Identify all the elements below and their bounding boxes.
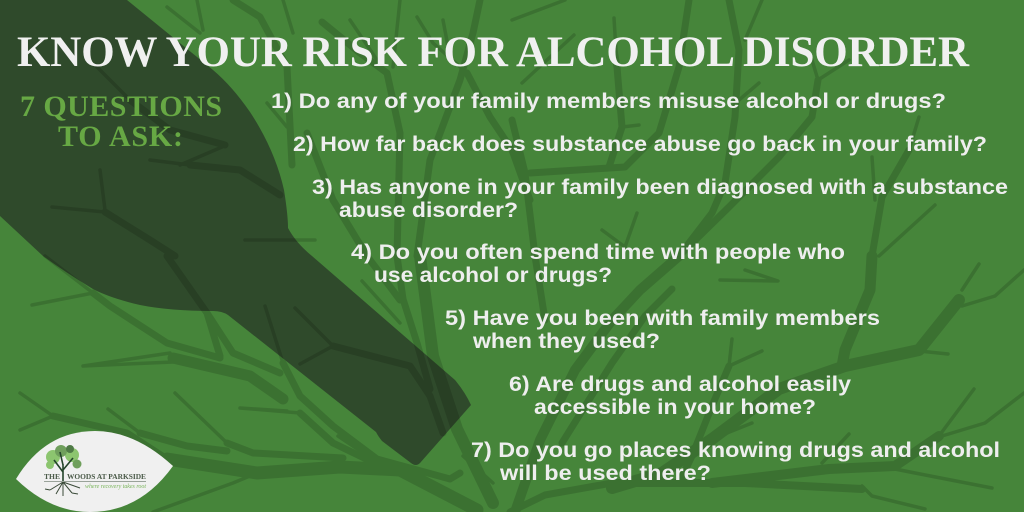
question 5: 5) Have you been with family members [445, 306, 880, 330]
question 7: 7) Do you go places knowing drugs and alcohol [471, 438, 1000, 462]
question 1: 1) Do any of your family members misuse alcohol or drugs? [271, 89, 946, 113]
logo badge [16, 431, 173, 512]
question 7: will be used there? [499, 461, 711, 485]
wine bottle silhouette [0, 0, 471, 465]
question 5 [445, 306, 880, 353]
logo wordmark: THE [44, 472, 60, 481]
question 4: use alcohol or drugs? [374, 263, 612, 287]
thick limbs [167, 256, 959, 512]
question 5: when they used? [472, 329, 660, 353]
logo rule [44, 481, 146, 482]
question 4 [351, 240, 845, 287]
question 6 [509, 372, 851, 419]
question 3: abuse disorder? [339, 198, 518, 222]
question 6: 6) Are drugs and alcohol easily [509, 372, 851, 396]
logo wordmark: WOODS AT PARKSIDE [67, 472, 146, 481]
question 6: accessible in your home? [534, 395, 816, 419]
subtitle: 7 questions to ask: 7 QUESTIONS [20, 90, 222, 123]
leaf shape [16, 431, 173, 512]
question 3: 3) Has anyone in your family been diagnosed with a substance [312, 175, 1008, 199]
question 3 [312, 175, 1008, 222]
logo tagline: where recovery takes root [85, 484, 146, 490]
subtitle: 7 questions to ask [20, 90, 222, 153]
title: KNOW YOUR RISK FOR ALCOHOL DISORDER [17, 29, 970, 76]
question 7 [471, 438, 1000, 485]
subtitle: 7 questions to ask: TO ASK: [58, 120, 183, 153]
icon: tree logo [45, 445, 82, 496]
question 2: 2) How far back does substance abuse go back in your family? [293, 132, 987, 156]
question 4: 4) Do you often spend time with people who [351, 240, 845, 264]
